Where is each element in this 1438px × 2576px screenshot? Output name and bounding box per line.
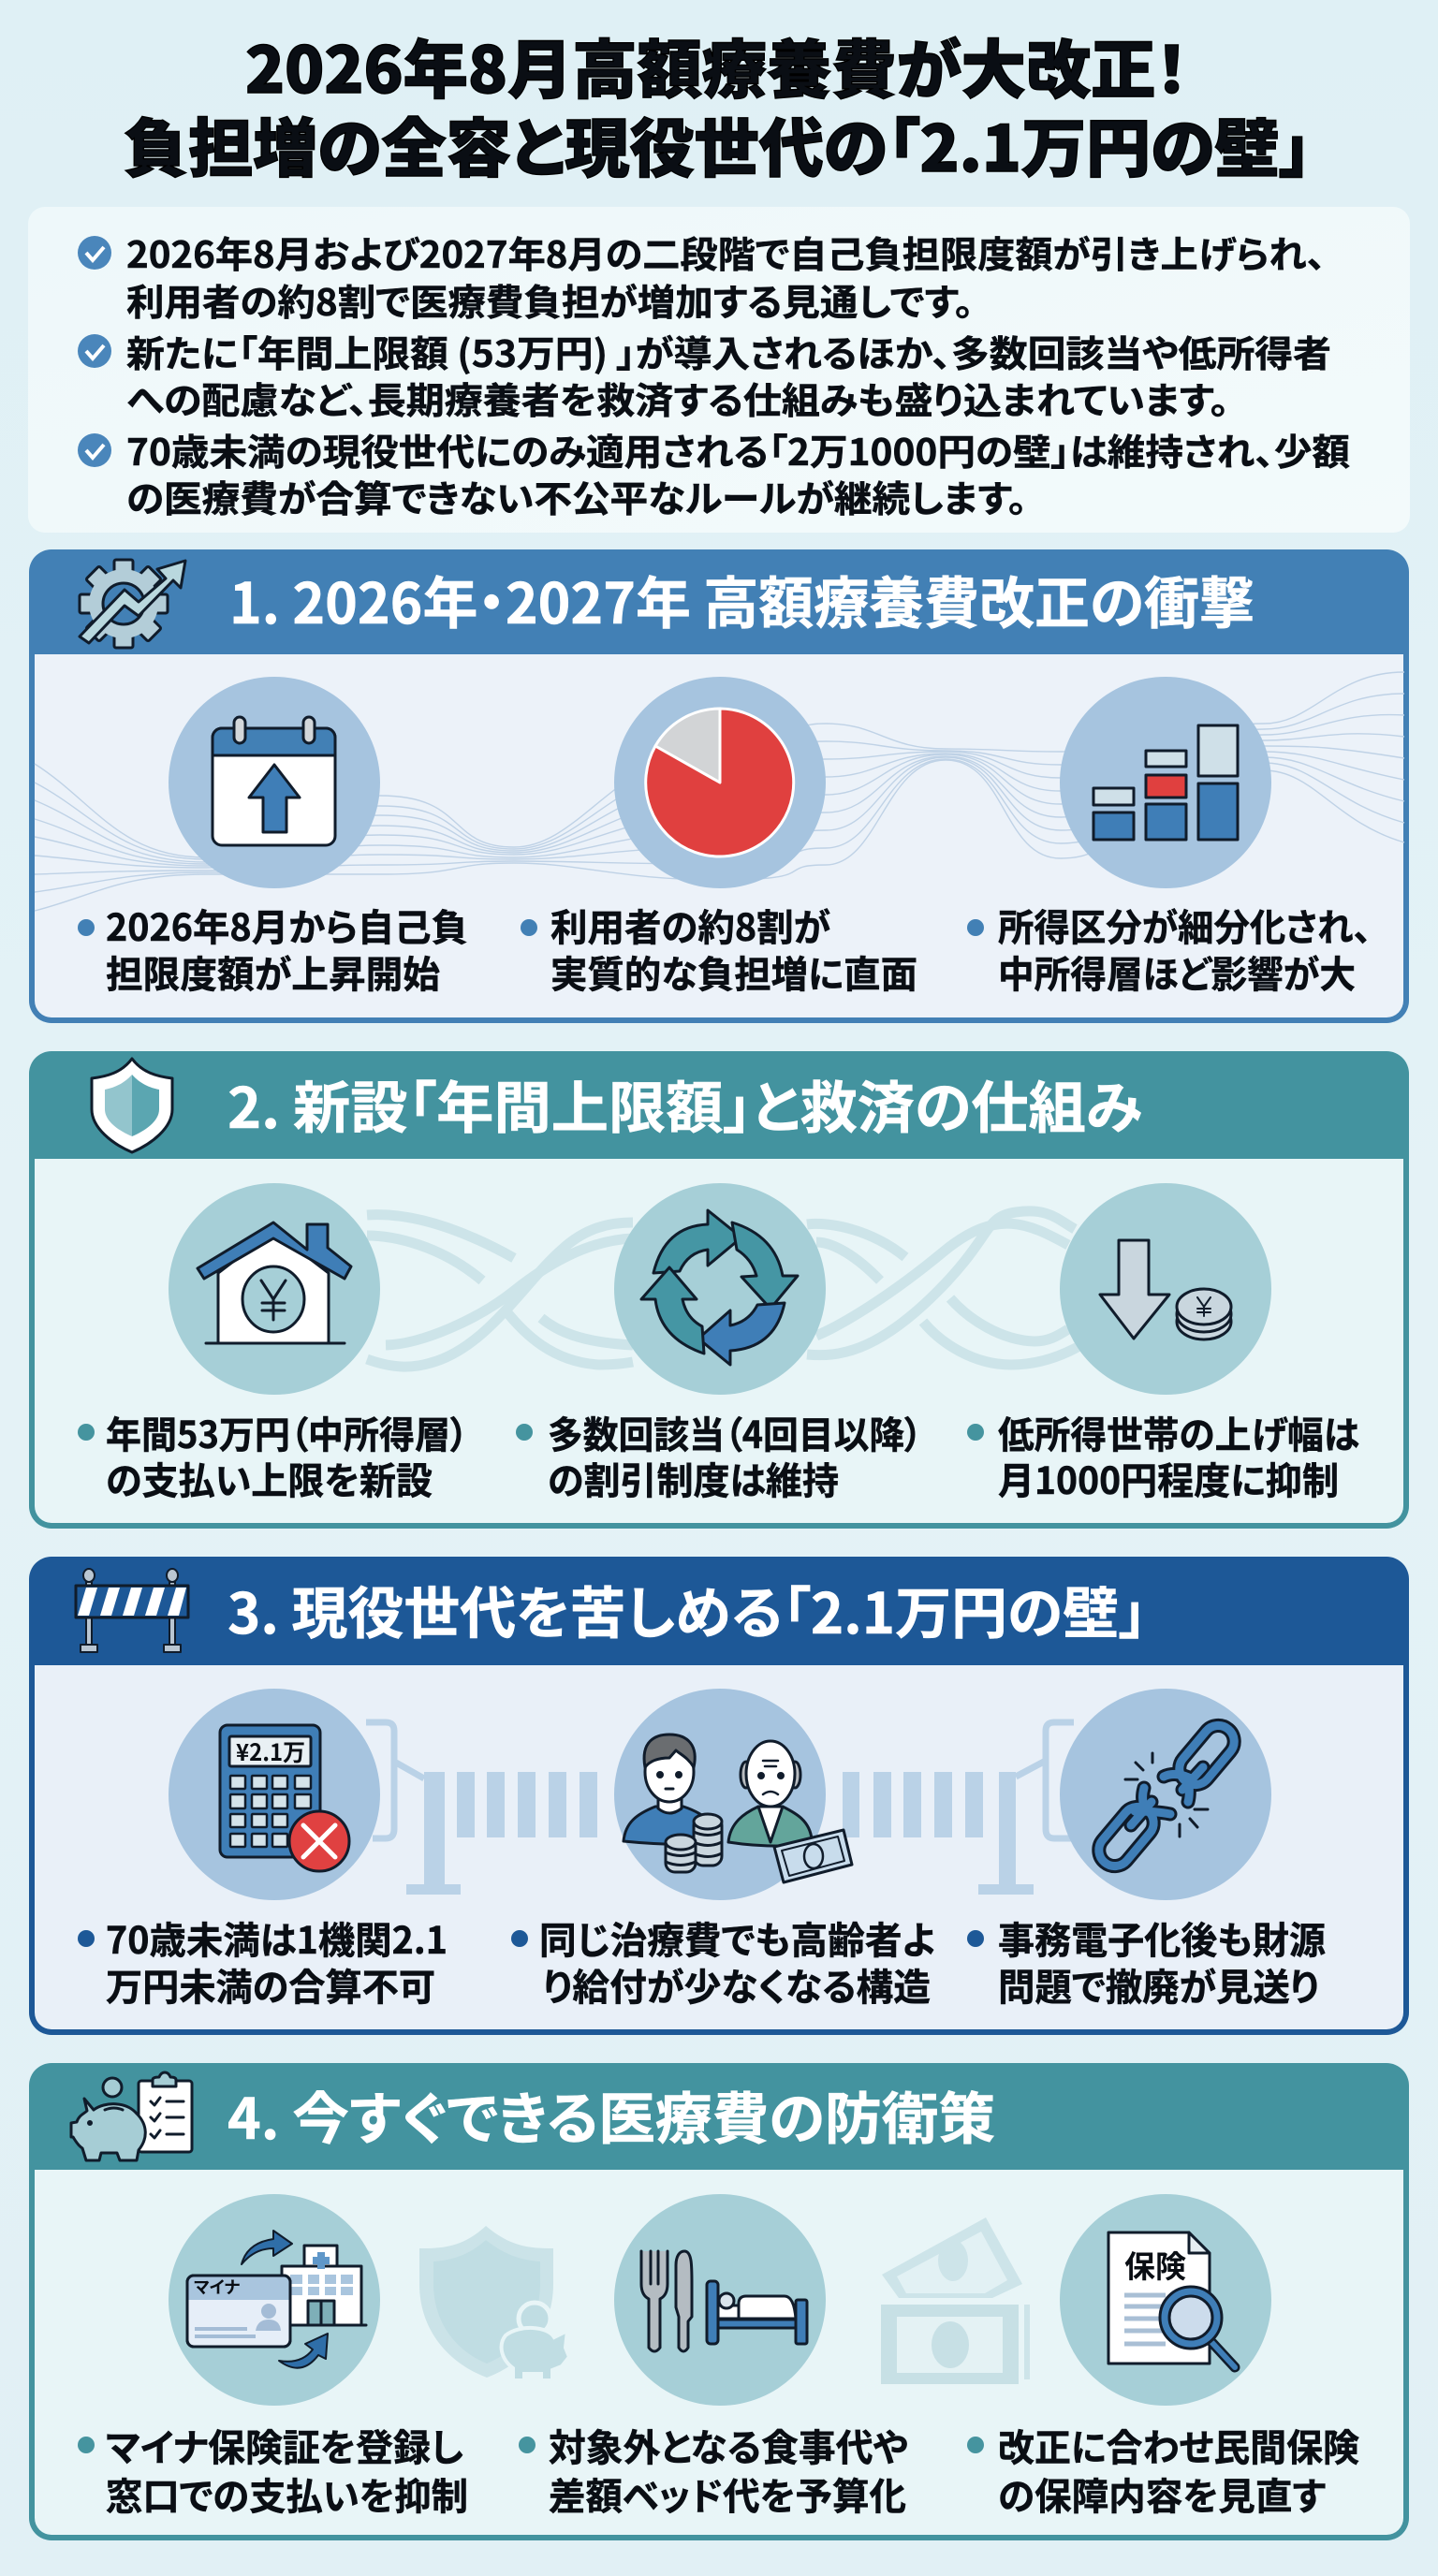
item 4-3: insurance document: 改正に合わせ民間保険: [998, 2418, 1359, 2472]
item 3-2: young and elderly people: 同じ治療費でも高齢者よ: [539, 1910, 935, 1965]
item 3-2: young and elderly people: り給付が少なくなる構造: [543, 1957, 931, 2012]
title: 負担増の全容と現役世代の「2.1万円の壁」: [124, 97, 1312, 190]
summary point 1: 2026年8月および2027年8月の二段階で自己負担限度額が引き上げられ、: [126, 227, 1326, 279]
item 1-3: stacked bars: 中所得層ほど影響が大: [998, 944, 1356, 999]
header icon: shield: [92, 1059, 172, 1152]
item 2-3: down arrow and coins: 月1000円程度に抑制: [998, 1451, 1339, 1505]
item 3-1: calculator: ¥2.1万: [236, 1734, 305, 1768]
item 2-2: cycle: 多数回該当（4回目以降）: [548, 1405, 922, 1459]
title: [124, 19, 1312, 190]
item 3-1: calculator: [78, 1689, 448, 2012]
item 2-2: cycle: の割引制度は維持: [548, 1451, 839, 1505]
panel 2: annual cap and relief: [29, 1051, 1409, 1529]
summary point 3: [78, 424, 1350, 523]
heading 4: 4. 今すぐできる医療費の防衛策: [227, 2074, 995, 2156]
item 2-3: down arrow and coins: 低所得世帯の上げ幅は: [998, 1405, 1359, 1459]
ghost banknotes: [881, 2217, 1030, 2384]
panel 1 frame: [29, 549, 1409, 1023]
item 1-3: stacked bars: 所得区分が細分化され、: [998, 898, 1372, 952]
item 4-1: my number card: 窓口での支払いを抑制: [106, 2466, 468, 2521]
item 4-2: meals and bed: 差額ベッド代を予算化: [549, 2466, 906, 2521]
item 4-3: insurance document: の保障内容を見直す: [998, 2466, 1326, 2521]
icon: broken chain: [1093, 1719, 1240, 1873]
chart: 80 percent pie: [646, 709, 794, 856]
panel 3: the 2.1 man-yen wall: [29, 1557, 1409, 2035]
item 1-1: calendar: 2026年8月から自己負: [106, 898, 468, 952]
item 3-3: broken chain: 問題で撤廃が見送り: [998, 1957, 1319, 2012]
item 4-2: meals and bed: 対象外となる食事代や: [549, 2418, 908, 2472]
summary point 2: [78, 326, 1331, 425]
title: 2026年8月高額療養費が大改正！: [245, 19, 1188, 111]
item 2-1: house: 年間53万円（中所得層）: [106, 1405, 468, 1459]
icon: recycling arrows: [641, 1210, 798, 1365]
header icon: road barrier: [76, 1569, 188, 1652]
item 1-3: stacked bars: [967, 677, 1372, 999]
item 2-3: down arrow and coins: [967, 1183, 1359, 1505]
chart: income bands: [1093, 725, 1238, 840]
panel 2 frame: [29, 1051, 1409, 1529]
header icon: piggy bank and checklist: [71, 2072, 192, 2160]
icon: card and hospital: [187, 2231, 366, 2368]
item 4-1: my number card: マイナ保険証を登録し: [106, 2418, 463, 2472]
panel: summary: [28, 207, 1410, 533]
icon: worker and elderly person with money: [624, 1734, 852, 1882]
item 1-2: pie chart: 実質的な負担増に直面: [550, 944, 917, 999]
item 1-2: pie chart: 利用者の約8割が: [550, 898, 830, 952]
item 4-1: my number card: マイナ: [194, 2275, 240, 2299]
item 1-2: pie chart: [521, 677, 917, 999]
icon: down arrow with coins: [1100, 1240, 1231, 1339]
icon: insurance document and magnifier: [1108, 2232, 1235, 2367]
heading 3: 3. 現役世代を苦しめる「2.1万円の壁」: [227, 1569, 1147, 1650]
item 1-1: calendar: [78, 677, 468, 999]
item 3-2: young and elderly people: [511, 1689, 935, 2012]
item 3-1: calculator: 万円未満の合算不可: [106, 1957, 435, 2012]
item 3-3: broken chain: 事務電子化後も財源: [998, 1910, 1326, 1965]
summary point 1: 利用者の約8割で医療費負担が増加する見通しです。: [126, 274, 974, 327]
item 3-3: broken chain: [967, 1689, 1326, 2012]
icon: fork, knife and bed: [641, 2251, 807, 2351]
icon: calendar with up arrow: [213, 717, 335, 845]
icon: house with yen: [198, 1222, 351, 1343]
panel 3 frame: [29, 1557, 1409, 2035]
ghost shield and piggy bank: [419, 2226, 569, 2380]
item 4-2: meals and bed: [519, 2194, 908, 2521]
summary point 2: への配慮など、長期療養者を救済する仕組みも盛り込まれています。: [126, 373, 1229, 425]
item 4-3: insurance document: [967, 2194, 1359, 2521]
item 2-1: house: [78, 1183, 468, 1505]
summary point 3: の医療費が合算できない不公平なルールが継続します。: [126, 471, 1027, 523]
heading 2: 2. 新設「年間上限額」と救済の仕組み: [227, 1063, 1142, 1145]
panel 4 frame: [29, 2063, 1409, 2540]
item 2-2: cycle: [516, 1183, 922, 1505]
item 4-3: insurance document: 保険: [1124, 2242, 1186, 2287]
item 3-1: calculator: 70歳未満は1機関2.1: [106, 1910, 448, 1965]
header icon: gear with rising arrow: [80, 560, 185, 648]
icon: calculator with cross: [220, 1725, 349, 1871]
summary point 3: 70歳未満の現役世代にのみ適用される「2万1000円の壁」は維持され、少額: [126, 424, 1350, 476]
summary point 2: 新たに「年間上限額 (53万円) 」が導入されるほか、多数回該当や低所得者: [126, 326, 1331, 378]
summary point 1: [78, 227, 1326, 327]
item 4-1: my number card: [78, 2194, 468, 2521]
panel 1: shock of the revision: [29, 549, 1409, 1023]
panel 4: defensive measures: [29, 2063, 1409, 2540]
item 2-1: house: の支払い上限を新設: [106, 1451, 433, 1505]
item 1-1: calendar: 担限度額が上昇開始: [106, 944, 440, 999]
heading 1: 1. 2026年・2027年 高額療養費改正の衝撃: [229, 559, 1255, 640]
